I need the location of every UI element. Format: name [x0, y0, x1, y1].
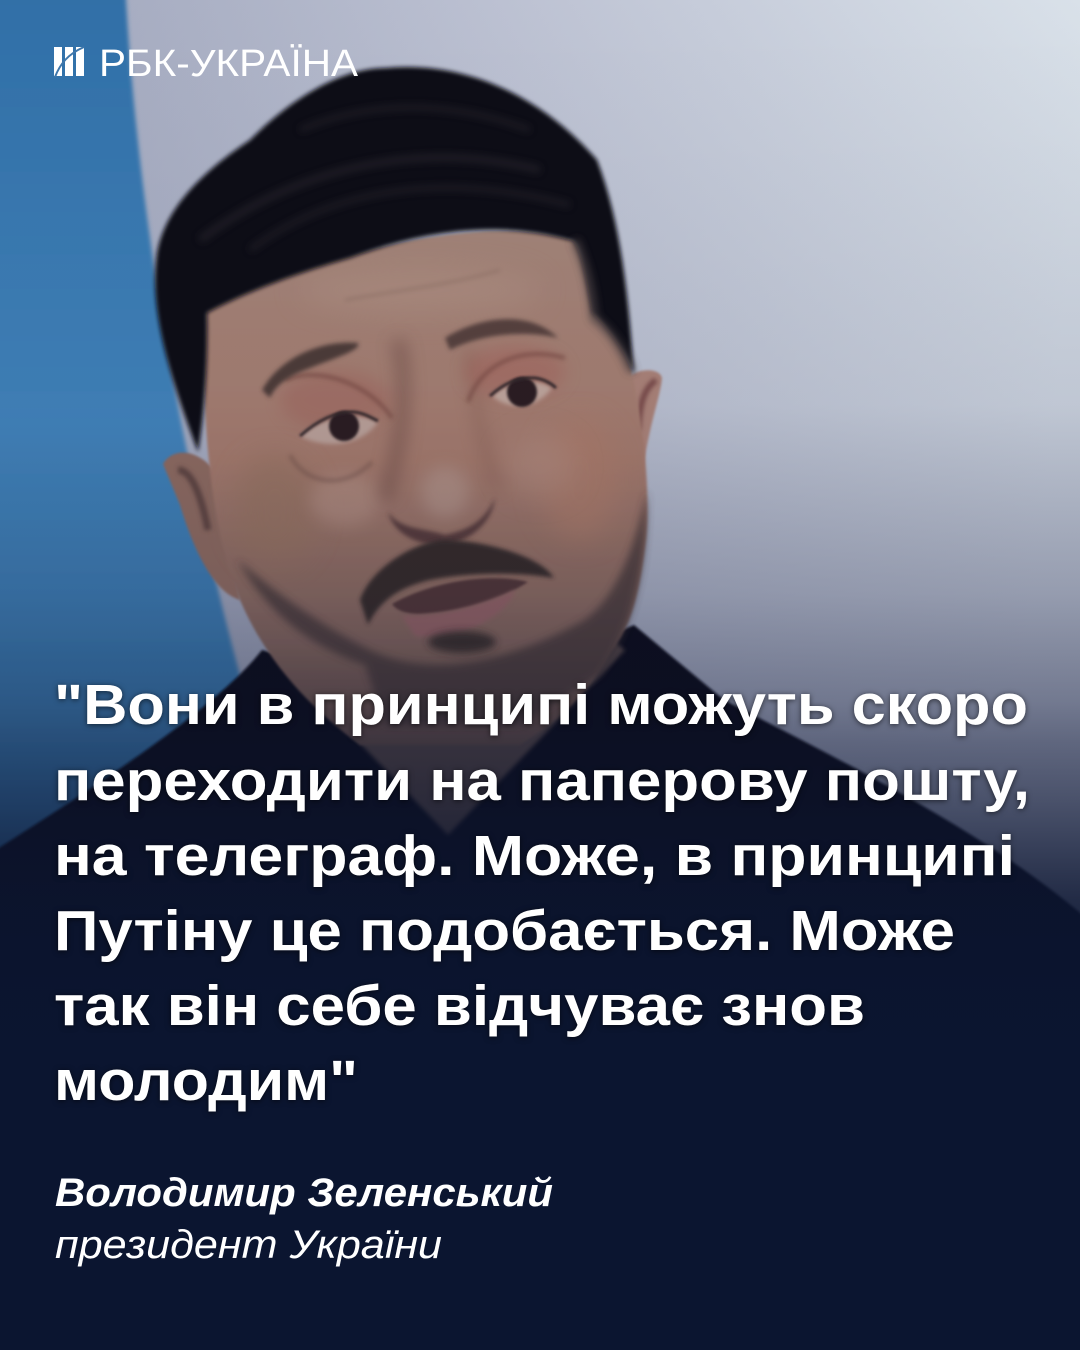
right eyebrow — [445, 319, 558, 350]
moustache — [360, 540, 554, 625]
speaker role: президент України — [55, 1223, 442, 1267]
jacket — [0, 625, 1080, 1350]
left eye — [300, 411, 378, 444]
quote headline: молодим" — [54, 1049, 358, 1113]
quote headline: Путіну це подобається. Може — [54, 899, 955, 963]
hair — [155, 67, 634, 452]
quote headline: "Вони в принципі можуть скоро — [54, 673, 1028, 737]
facial shading — [235, 266, 620, 565]
logo wordmark: РБК-УКРАЇНА — [99, 43, 359, 85]
quote headline: так він себе відчуває знов — [54, 974, 865, 1038]
mouth — [392, 578, 528, 614]
attribution — [55, 1171, 553, 1267]
stubble — [238, 490, 647, 725]
left ear — [163, 453, 240, 600]
speaker name: Володимир Зеленський — [55, 1171, 553, 1215]
goatee — [428, 631, 496, 653]
right ear — [620, 370, 662, 490]
neck — [280, 600, 625, 835]
quote headline — [54, 673, 1030, 1113]
quote headline: на телеграф. Може, в принципі — [54, 824, 1015, 888]
nose — [388, 498, 495, 545]
left eyebrow — [262, 343, 358, 398]
quote headline: переходити на паперову пошту, — [54, 749, 1030, 813]
right eye — [490, 377, 556, 407]
hair strands — [200, 108, 570, 250]
logo icon — [54, 47, 84, 77]
logo: РБК-Україна — [54, 43, 359, 85]
face — [204, 231, 647, 745]
